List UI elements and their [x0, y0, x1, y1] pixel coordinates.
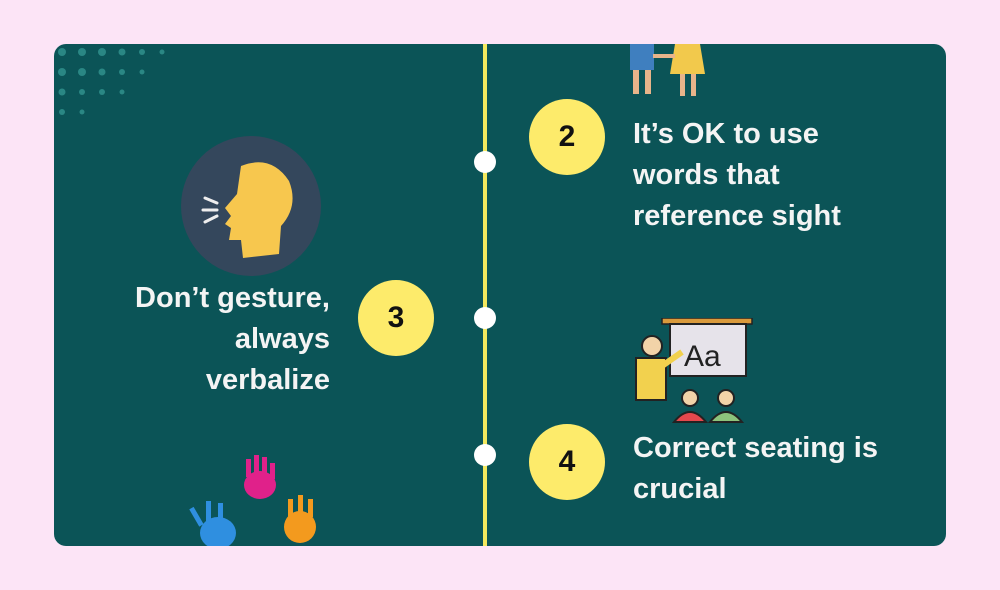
step 3 badge: [358, 280, 434, 356]
icon: teacher: Aa: [684, 340, 721, 373]
step 4 badge: 4: [559, 445, 575, 478]
panel: main: [54, 44, 946, 546]
step 3 badge: 3: [388, 301, 404, 334]
step 2 text: reference sight: [633, 200, 841, 232]
step 2 text: words that: [633, 159, 780, 191]
icon: speaking head: [181, 136, 321, 276]
step 3 text: Don’t gesture,: [135, 282, 330, 314]
timeline dot 2: [474, 307, 496, 329]
icon: kids: [630, 44, 705, 96]
timeline dot 3: [474, 444, 496, 466]
timeline line: [483, 44, 487, 546]
step 4 badge: [529, 424, 605, 500]
step 3 text: verbalize: [206, 364, 330, 396]
step 3 text: always: [235, 323, 330, 355]
timeline dot 1: [474, 151, 496, 173]
icon: hand prints: [189, 455, 316, 546]
step 4 text: [633, 432, 878, 505]
step 2 text: It’s OK to use: [633, 118, 819, 150]
step 2 badge: 2: [559, 120, 575, 153]
step 3 text: [135, 282, 330, 396]
step 4 text: crucial: [633, 473, 726, 505]
icon: teacher: [635, 318, 753, 423]
dot pattern decoration: [58, 48, 164, 115]
step 2 text: [632, 118, 841, 232]
step 2 badge: [529, 99, 605, 175]
step 4 text: Correct seating is: [633, 432, 878, 464]
